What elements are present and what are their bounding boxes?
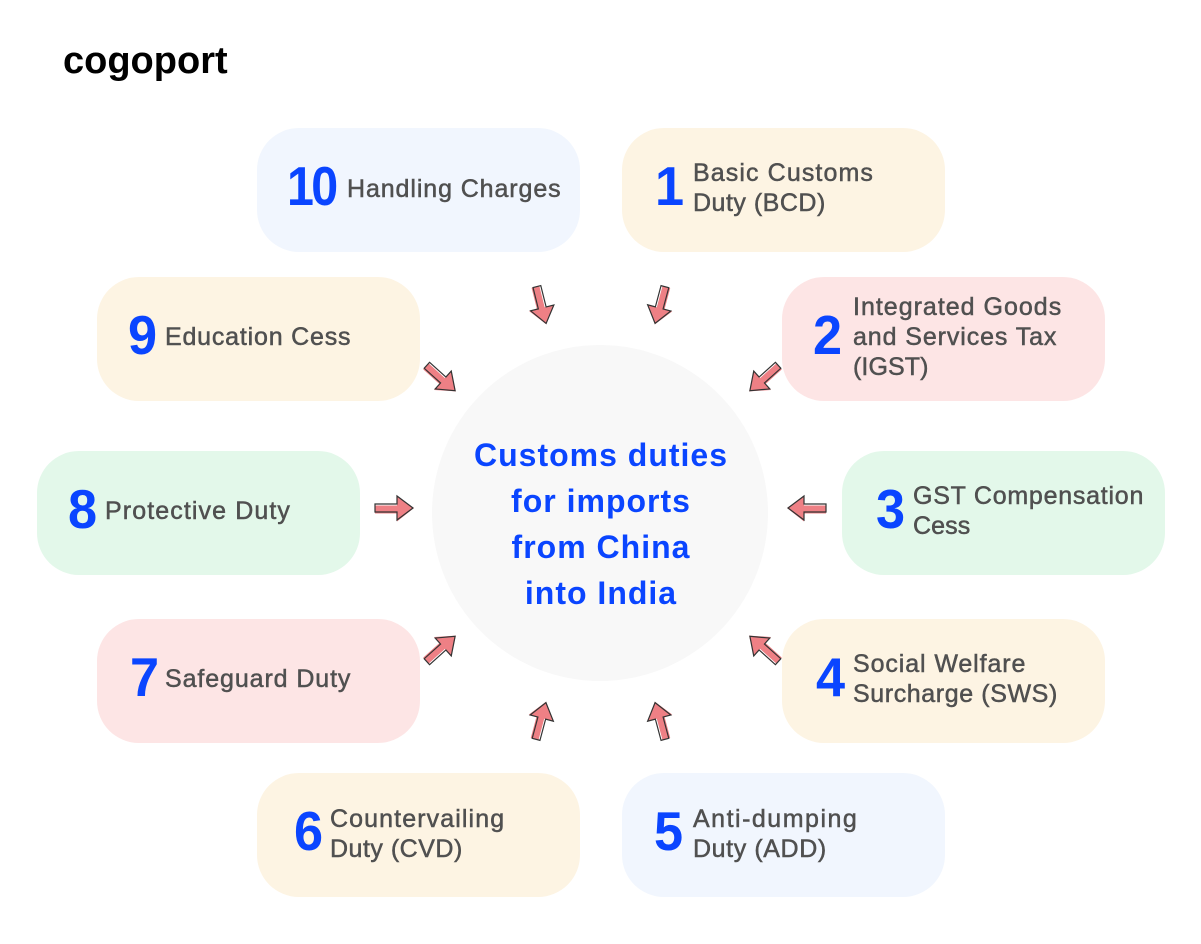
arrow: lower right	[741, 626, 787, 671]
arrow: upper right	[741, 356, 787, 401]
card 10: Handling Charges: Handling Charges	[347, 175, 562, 203]
card 1: Basic Customs Duty: 1	[655, 155, 684, 217]
card 3: GST Compensation Cess: Cess	[913, 512, 970, 540]
card 3: GST Compensation Cess: GST Compensation	[913, 482, 1144, 510]
card 5: Anti-dumping Duty: 5	[654, 800, 683, 862]
centre circle	[432, 345, 768, 681]
card 10: Handling Charges: 10	[287, 155, 336, 217]
card 9: Education Cess: Education Cess	[165, 323, 351, 351]
card 6: Countervailing Duty	[257, 773, 580, 897]
card 1: Basic Customs Duty	[622, 128, 945, 252]
card 8: Protective Duty: 8	[68, 478, 97, 540]
card 5: Anti-dumping Duty: Duty (ADD)	[693, 835, 827, 863]
arrow: bottom right	[643, 698, 678, 742]
centre heading	[474, 437, 728, 611]
card 4: Social Welfare Surcharge: 4	[816, 646, 845, 708]
card 9: Education Cess	[97, 277, 420, 401]
card 7: Safeguard Duty: 7	[130, 646, 159, 708]
card 8: Protective Duty: Protective Duty	[105, 497, 291, 525]
card 6: Countervailing Duty: 6	[294, 800, 323, 862]
centre heading: from China	[512, 529, 690, 565]
card 2: Integrated Goods and Services Tax: 2	[813, 304, 842, 366]
card 8: Protective Duty	[37, 451, 360, 575]
card 2: Integrated Goods and Services Tax	[782, 277, 1105, 401]
card 7: Safeguard Duty	[97, 619, 420, 743]
card 10: Handling Charges	[257, 128, 580, 252]
card 7: Safeguard Duty: Safeguard Duty	[165, 665, 351, 693]
arrow: top right	[643, 284, 678, 328]
arrow: lower left	[418, 626, 464, 671]
arrow: upper left	[418, 356, 464, 401]
card 6: Countervailing Duty: Countervailing	[330, 805, 505, 833]
logo: cogoport: cogoport	[63, 40, 228, 82]
card 2: Integrated Goods and Services Tax: and Services Tax	[853, 323, 1057, 351]
arrow: bottom left	[523, 698, 558, 742]
card 4: Social Welfare Surcharge: Surcharge (SWS)	[853, 680, 1058, 708]
card 1: Basic Customs Duty: Basic Customs	[693, 159, 874, 187]
card 4: Social Welfare Surcharge: Social Welfare	[853, 650, 1026, 678]
card 2: Integrated Goods and Services Tax: (IGST)	[853, 353, 929, 381]
arrow: right	[787, 496, 826, 522]
card 3: GST Compensation Cess	[842, 451, 1165, 575]
card 2: Integrated Goods and Services Tax: Integrated Goods	[853, 293, 1062, 321]
card 5: Anti-dumping Duty	[622, 773, 945, 897]
centre heading: for imports	[511, 483, 691, 519]
card 3: GST Compensation Cess: 3	[876, 478, 905, 540]
centre heading: Customs duties	[474, 437, 728, 473]
centre heading: into India	[525, 575, 677, 611]
card 4: Social Welfare Surcharge	[782, 619, 1105, 743]
card 1: Basic Customs Duty: Duty (BCD)	[693, 189, 826, 217]
card 9: Education Cess: 9	[128, 304, 157, 366]
card 6: Countervailing Duty: Duty (CVD)	[330, 835, 463, 863]
arrow: left	[375, 496, 414, 522]
card 5: Anti-dumping Duty: Anti-dumping	[693, 805, 858, 833]
arrow: top left	[524, 284, 558, 328]
